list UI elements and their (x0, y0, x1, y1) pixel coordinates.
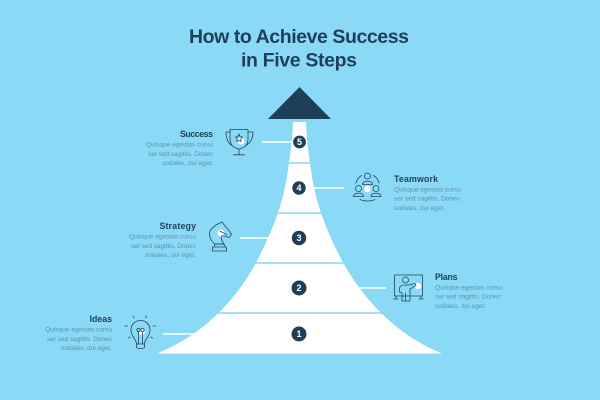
text: ideas: sodales, dui eget. (61, 345, 112, 352)
text: plans: Plans (435, 272, 458, 282)
text: strategy: ser sed sagittis. Donec (131, 243, 197, 250)
title (189, 26, 409, 72)
text: teamwork: ser sed sagittis. Donec (394, 196, 461, 202)
step 3 badge: 3 (296, 233, 302, 243)
icon: chess knight (209, 222, 232, 251)
title: in Five Steps (241, 50, 357, 72)
step 1 badge (292, 326, 306, 342)
step 2 badge (292, 280, 306, 296)
icon: team (354, 173, 381, 201)
icon: presentation board (394, 275, 424, 301)
text: success: ser sed sagittis. Donec (148, 151, 214, 158)
rising path of five steps (157, 122, 442, 354)
text: plans: Quisque egestas cursu (435, 284, 502, 292)
text: strategy: Quisque egestas cursu (129, 234, 196, 240)
text: plans: ser sed sagittis. Donec (435, 294, 502, 300)
step 4 badge: 4 (296, 183, 302, 193)
step 2 badge: 2 (296, 283, 302, 293)
step 5 badge (293, 136, 306, 148)
text: strategy (129, 221, 197, 259)
text: teamwork (394, 174, 461, 212)
text: teamwork: sodales, dui eget. (394, 205, 445, 212)
step 3 badge (292, 231, 306, 245)
text: success: Success (180, 129, 213, 139)
arrow head (268, 87, 331, 119)
text: ideas (45, 314, 113, 352)
text: ideas: ser sed sagittis. Donec (47, 336, 113, 343)
text: strategy: Strategy (160, 221, 196, 231)
text: success (146, 129, 214, 167)
text: strategy: sodales, dui eget. (145, 252, 196, 259)
step 4 badge (292, 181, 306, 195)
text: teamwork: Quisque egestas cursu (394, 186, 461, 194)
text: plans: sodales, dui eget. (435, 303, 486, 310)
step dividers (210, 163, 390, 313)
connector lines (163, 142, 386, 334)
arrow shaft (157, 122, 442, 354)
text: plans (435, 272, 502, 310)
text: success: sodales, dui eget. (162, 160, 213, 167)
text: ideas: Ideas (90, 314, 112, 324)
text: success: Quisque egestas cursu (146, 142, 213, 148)
icon: trophy (226, 130, 253, 155)
step 1 badge: 1 (296, 329, 302, 339)
text: ideas: Quisque egestas cursu (45, 326, 112, 334)
text: teamwork: Teamwork (394, 174, 438, 184)
step 5 badge: 5 (297, 137, 302, 147)
icon: light bulb (125, 316, 156, 348)
title: How to Achieve Success (189, 26, 409, 48)
